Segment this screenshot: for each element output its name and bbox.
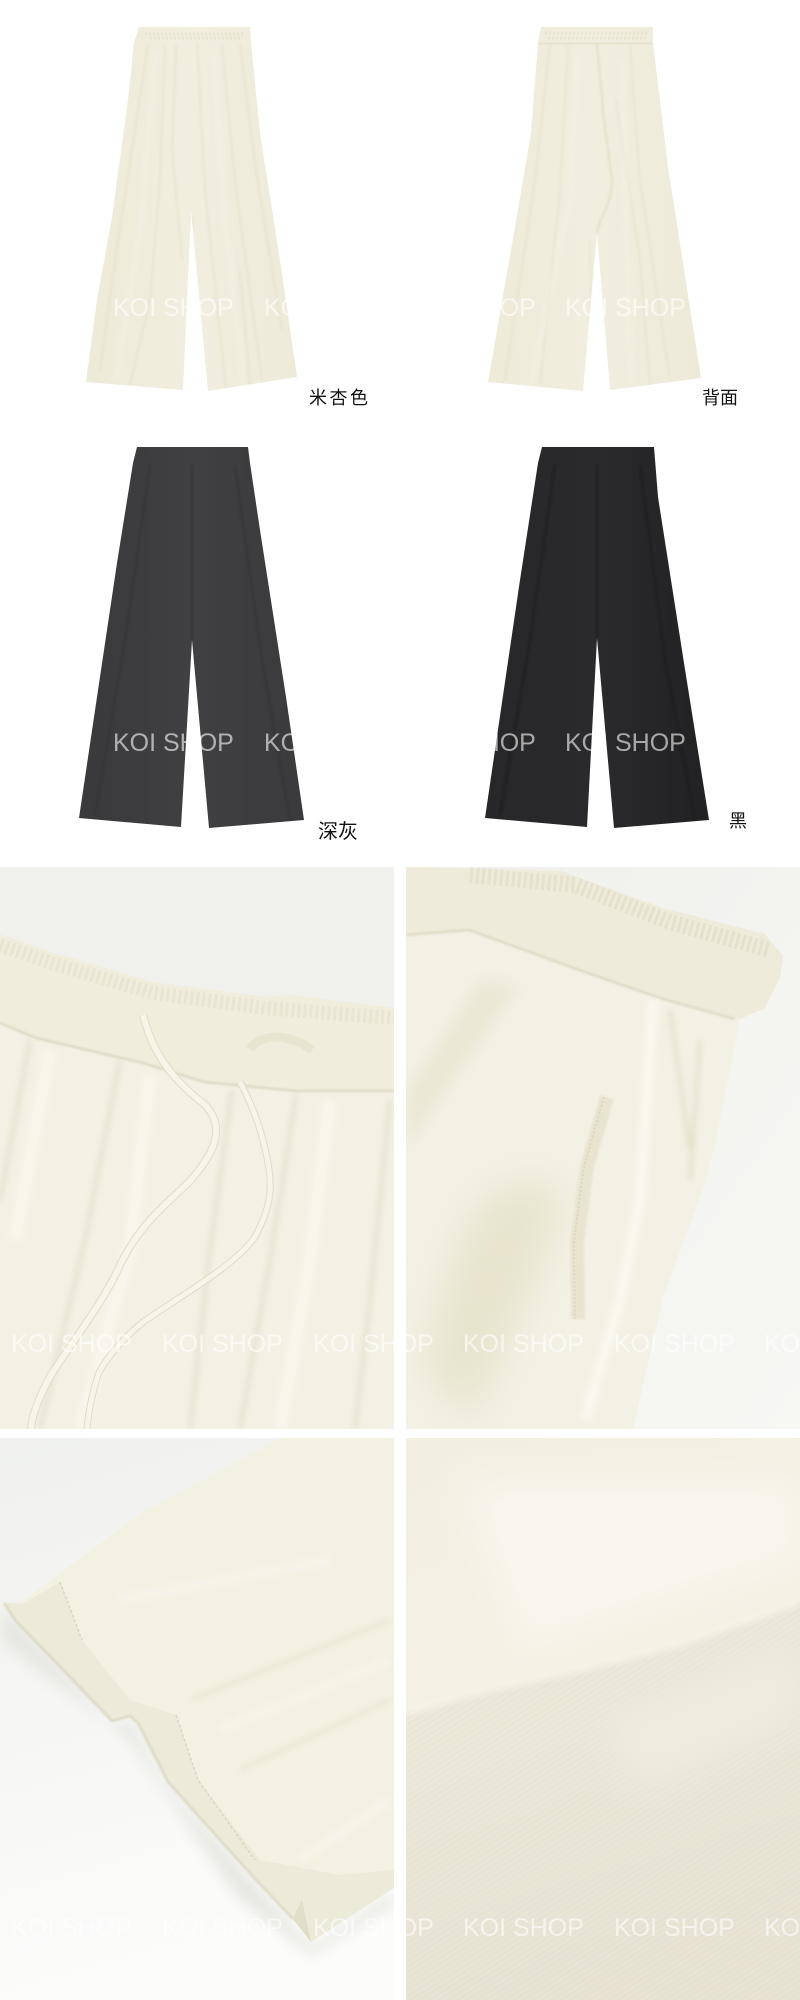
pocket edge <box>585 1000 653 1420</box>
watermark row 1: KOI SHOP <box>264 294 385 322</box>
watermark row 2: KOI SHOP <box>415 729 536 757</box>
watermark row 2 <box>113 729 686 757</box>
darker hem band <box>4 1582 394 1942</box>
watermark row 1: KOI SHOP <box>415 294 536 322</box>
label: back: 背面 <box>702 388 738 408</box>
waist seam <box>0 1023 394 1091</box>
label: dark grey: 深灰 <box>318 820 358 843</box>
detail photo: fabric close-up <box>406 1438 800 2000</box>
drawstring cords <box>31 1015 312 1429</box>
product photo: dark grey pants <box>75 440 310 835</box>
watermark row 2: KOI SHOP <box>565 729 686 757</box>
watermark row 4: KOI SHOP <box>313 1914 434 1942</box>
waistband gathers <box>134 42 251 44</box>
product photo: beige pants back <box>480 20 705 400</box>
detail photo: side pocket <box>406 867 800 1429</box>
watermark row 4 <box>11 1914 800 1942</box>
watermark row 3: KOI SHOP <box>463 1330 584 1358</box>
cast shadow under hem <box>0 1606 394 1955</box>
watermark row 3: KOI SHOP <box>313 1330 434 1358</box>
watermark row 3: KOI SHOP <box>11 1330 132 1358</box>
waistband gathers <box>538 462 656 464</box>
product photo: beige pants front <box>86 27 297 391</box>
watermark row 1: KOI SHOP <box>113 294 234 322</box>
watermark row 3: KOI SHOP <box>614 1330 735 1358</box>
waistband gathers <box>133 462 250 464</box>
detail photo: trouser hem <box>0 1438 394 2000</box>
watermark row 4: KOI SHOP <box>614 1914 735 1942</box>
label: black: 黑 <box>729 811 747 831</box>
pocket shadow <box>425 1182 560 1420</box>
watermark row 3: KOI SHOP <box>162 1330 283 1358</box>
product photo: black pants <box>480 440 715 835</box>
watermark row 1 <box>113 294 686 322</box>
waistband gathers <box>538 43 653 44</box>
watermark row 4: KOI SHOP <box>463 1914 584 1942</box>
waistband band <box>0 934 394 1091</box>
watermark row 4: KOI SHOP <box>11 1914 132 1942</box>
watermark row 4: KOI SHOP <box>162 1914 283 1942</box>
detail photo: waistband and drawstring <box>0 867 394 1429</box>
watermark row 1: KOI SHOP <box>565 294 686 322</box>
pocket seam <box>577 1097 607 1319</box>
waistband band <box>406 867 783 1019</box>
watermark row 2: KOI SHOP <box>113 729 234 757</box>
watermark row 2: KOI SHOP <box>264 729 385 757</box>
watermark row 3 <box>11 1330 800 1358</box>
label: beige: 米杏色 <box>309 388 370 408</box>
